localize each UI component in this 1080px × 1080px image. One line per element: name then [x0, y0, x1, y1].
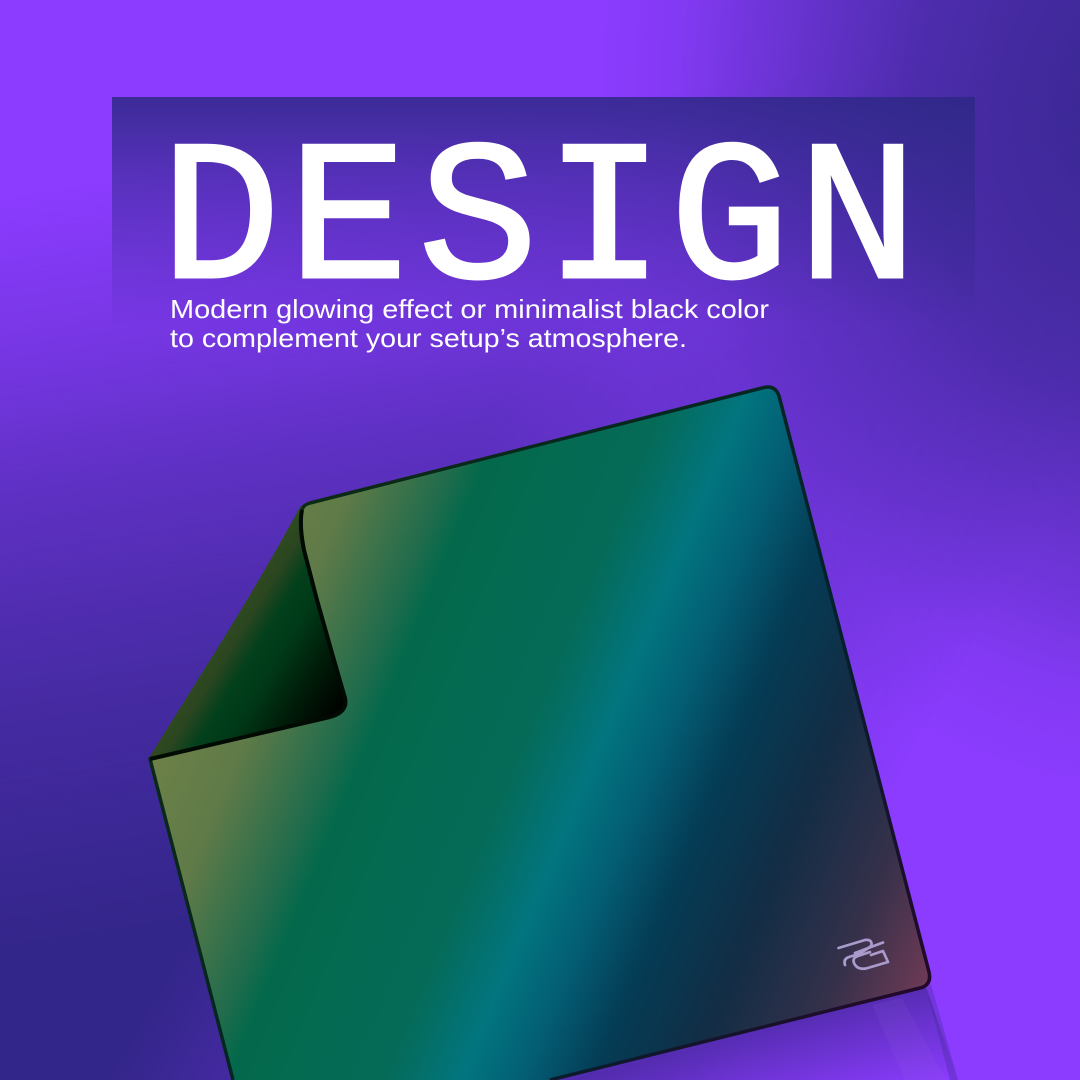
mousepad reflection — [550, 984, 958, 1080]
mousepad — [149, 387, 930, 1080]
title: DESIGN — [160, 111, 918, 338]
mousepad edge outline — [150, 387, 930, 1080]
subtitle text: to complement your setup’s atmosphere. — [170, 323, 687, 353]
title panel — [112, 97, 975, 326]
folded corner flap — [149, 505, 346, 758]
logo mark — [838, 940, 888, 969]
subtitle text: Modern glowing effect or minimalist black color — [170, 294, 769, 324]
fold crease — [150, 510, 345, 759]
mousepad surface — [150, 387, 930, 1080]
subtitle text — [170, 294, 769, 353]
